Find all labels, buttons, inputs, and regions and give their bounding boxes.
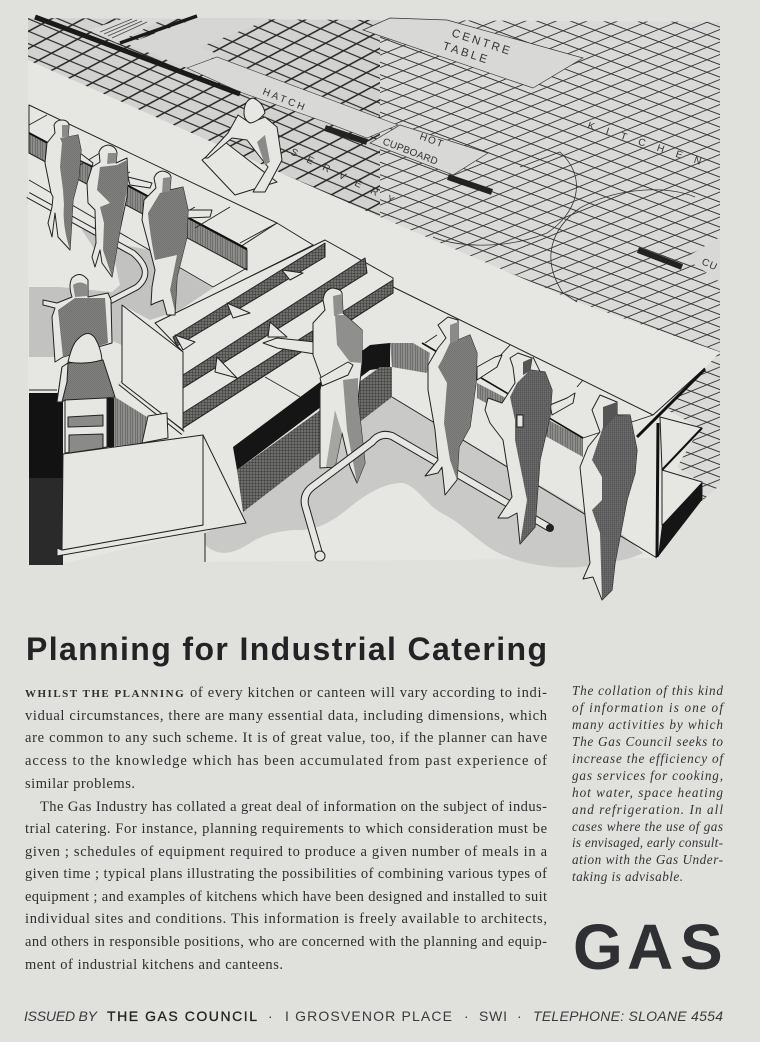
main body text: trial catering. For instance, planning requirements to which consideration must be bbox=[25, 821, 547, 837]
figure: left person 3 bbox=[142, 171, 212, 315]
GAS logo wordmark: GAS bbox=[573, 911, 723, 983]
hot cupboard: CUPBOARD bbox=[381, 137, 439, 168]
hot cupboard bbox=[370, 125, 488, 175]
illustration: kitchen and canteen isometric plan bbox=[28, 16, 720, 600]
side note in italics: cases where the use of gas bbox=[572, 819, 723, 834]
figure: counter person 3 bbox=[580, 395, 637, 600]
side note in italics: taking is advisable. bbox=[572, 869, 683, 884]
main body text: vidual circumstances, there are many essential data, including dimensions, which bbox=[25, 708, 548, 724]
side note in italics bbox=[572, 683, 725, 884]
main body text: equipment ; and examples of kitchens which have been designed and installed to suit bbox=[25, 889, 547, 905]
main body text: individual sites and conditions. This information is freely available to architects, bbox=[25, 911, 547, 927]
side note in italics: is envisaged, early consult- bbox=[572, 835, 723, 850]
footer issued-by line: · bbox=[464, 1008, 469, 1024]
floor labels bbox=[261, 87, 714, 211]
main body text: The Gas Industry has collated a great deal of information on the subject of indus- bbox=[40, 799, 547, 815]
side note in italics: The Gas Council seeks to bbox=[572, 734, 723, 749]
floor labels: SERVERY bbox=[289, 147, 405, 211]
title: Planning for Industrial Catering bbox=[26, 631, 547, 667]
side note in italics: increase the efficiency of bbox=[572, 751, 725, 766]
main body text: WHILST THE PLANNING bbox=[25, 688, 185, 700]
cupboard patch at right: CU bbox=[700, 257, 719, 273]
figure: counter person 2 bbox=[485, 353, 575, 544]
hatching behind chair bbox=[107, 397, 147, 447]
main body text: given ; schedules of equipment required to produce a given number of meals in a bbox=[25, 844, 548, 860]
side note in italics: many activities by which bbox=[572, 717, 723, 732]
tiled kitchen floor: right part bbox=[380, 20, 720, 352]
figure: left person 1 bbox=[45, 120, 93, 250]
black wall at lower left bbox=[29, 390, 63, 565]
pipe rail: left bbox=[28, 195, 145, 302]
figure: seated man bbox=[43, 274, 112, 362]
main body text: and others in responsible positions, who are concerned with the planning and equip- bbox=[25, 934, 547, 950]
swing door arcs bbox=[433, 152, 695, 302]
floor shadow blob bbox=[205, 397, 643, 568]
black gap behind chair bbox=[107, 398, 114, 447]
side note in italics: and refrigeration. In all bbox=[572, 802, 723, 817]
figure: counter person 1 bbox=[425, 317, 502, 495]
top-left drawing board bbox=[88, 18, 165, 43]
centre table: TABLE bbox=[441, 40, 491, 67]
footer issued-by line: THE GAS COUNCIL bbox=[107, 1008, 257, 1024]
main body text: ment of industrial kitchens and canteens. bbox=[25, 957, 283, 973]
main body text: given time ; typical plans illustrating the possibilities of combining various types of bbox=[25, 866, 547, 882]
centre table: CENTRE bbox=[450, 27, 514, 58]
main counter top and end panel bbox=[392, 287, 705, 558]
footer issued-by line: I GROSVENOR PLACE bbox=[285, 1008, 452, 1024]
end shelves bbox=[657, 417, 702, 557]
main body text: are common to any such scheme. It is of great value, too, if the planner can have bbox=[25, 730, 547, 746]
side note in italics: ation with the Gas Under- bbox=[572, 852, 723, 867]
figure: central man bbox=[263, 288, 365, 483]
figure: woman at hatch with plan bbox=[202, 98, 282, 195]
small seated head bbox=[142, 413, 168, 443]
partition panel bbox=[120, 305, 183, 433]
footer issued-by line: · bbox=[517, 1008, 522, 1024]
main body text: of every kitchen or canteen will vary according to indi- bbox=[190, 685, 547, 701]
main counter front face bbox=[233, 343, 430, 512]
hot cupboard: HOT bbox=[418, 131, 446, 150]
footer issued-by line: ISSUED BY bbox=[24, 1008, 99, 1024]
centre table bbox=[363, 18, 583, 88]
footer issued-by line: TELEPHONE: SLOANE 4554 bbox=[533, 1008, 723, 1024]
side note in italics: of information is one of bbox=[572, 700, 725, 715]
servery floor surface bbox=[28, 60, 720, 565]
pipe rail: centre bbox=[305, 435, 554, 561]
hatch band bbox=[187, 57, 398, 138]
left servery counter bbox=[29, 105, 313, 310]
main body text bbox=[25, 685, 548, 973]
figure: left person 2 bbox=[87, 145, 152, 277]
tiled floor right of counter bbox=[667, 352, 720, 500]
side note in italics: The collation of this kind bbox=[572, 683, 723, 698]
floor labels: KITCHEN bbox=[586, 120, 714, 171]
side note in italics: hot water, space heating bbox=[572, 785, 723, 800]
floor labels: HATCH bbox=[261, 87, 308, 114]
main body text: access to the knowledge which has been accumulated from past experience of bbox=[25, 753, 547, 769]
stepped shelf unit bbox=[155, 240, 393, 428]
plain floor panel bbox=[127, 18, 273, 68]
footer issued-by line: SWI bbox=[479, 1008, 507, 1024]
main body text: similar problems. bbox=[25, 776, 135, 792]
footer issued-by line bbox=[24, 1008, 723, 1024]
black partition walls bbox=[35, 16, 682, 267]
figure: seated woman with chair bbox=[57, 333, 115, 453]
tiled kitchen floor: left part bbox=[28, 18, 380, 217]
table bbox=[57, 435, 246, 562]
cupboard patch at right bbox=[685, 237, 720, 282]
side note in italics: gas services for cooking, bbox=[572, 768, 723, 783]
footer issued-by line: · bbox=[268, 1008, 273, 1024]
left floor shadow bbox=[29, 225, 213, 357]
